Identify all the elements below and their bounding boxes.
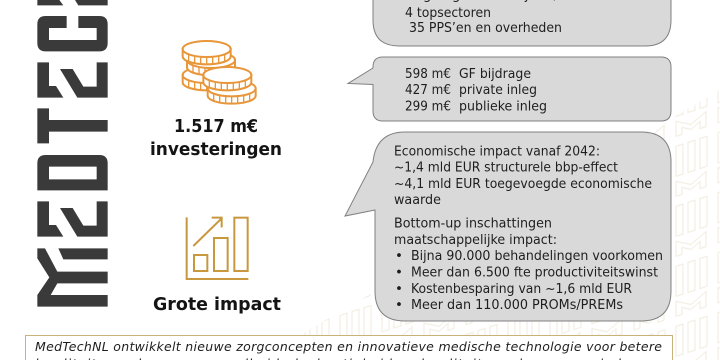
speech bubble: partners: 4 topsectoren — [405, 5, 491, 21]
heading: investeringen — [150, 117, 282, 160]
speech bubble: investments — [348, 57, 671, 121]
speech bubble: impact: • — [395, 281, 403, 297]
speech bubble: investments: 299 m€ — [405, 98, 451, 114]
heading: grote impact: Grote impact — [153, 295, 281, 315]
speech bubble: impact: • — [395, 297, 403, 313]
background pattern — [300, 90, 720, 360]
speech bubble: investments: GF bijdrage — [459, 66, 531, 82]
speech bubble: impact: Kostenbesparing van ~1,6 mld EUR — [411, 281, 632, 297]
speech bubble: impact: ~1,4 mld EUR structurele bbp-effect — [394, 160, 618, 176]
speech bubble: impact: maatschappelijke impact: — [394, 232, 557, 248]
speech bubble: partners — [373, 0, 671, 46]
speech bubble: impact: Economische impact vanaf 2042: — [394, 144, 600, 160]
description box: MedTechNL ontwikkelt nieuwe zorgconcepten en innovatieve medische technologie voor betere — [35, 339, 662, 354]
speech bubble: investments: 598 m€ — [405, 66, 451, 82]
icon: coins — [183, 41, 256, 104]
speech bubble: investments: private inleg — [459, 82, 537, 98]
description box — [26, 336, 672, 360]
speech bubble: investments: publieke inleg — [459, 98, 547, 114]
speech bubble: impact: ~4,1 mld EUR toegevoegde economische — [394, 176, 652, 192]
heading: investeringen: investeringen — [150, 140, 282, 160]
speech bubble: impact — [345, 132, 671, 321]
speech bubble: impact: waarde — [394, 192, 441, 208]
speech bubble: impact: Bottom-up inschattingen — [394, 216, 552, 232]
speech bubble: partners: 35 PPS’en en overheden — [409, 20, 562, 36]
speech bubble: impact: • — [395, 264, 403, 280]
speech bubble: impact: Bijna 90.000 behandelingen voorkomen — [411, 248, 663, 264]
speech bubble: impact: Meer dan 6.500 fte productiviteitswinst — [411, 264, 658, 280]
speech bubble: impact: Meer dan 110.000 PROMs/PREMs — [411, 297, 623, 313]
speech bubble: impact: • — [395, 248, 403, 264]
speech bubble: investments: 427 m€ — [405, 82, 451, 98]
logo: MedTech vertical wordmark — [37, 0, 108, 307]
icon: rising bar chart — [187, 217, 248, 279]
heading: investeringen: 1.517 m€ — [174, 117, 258, 137]
